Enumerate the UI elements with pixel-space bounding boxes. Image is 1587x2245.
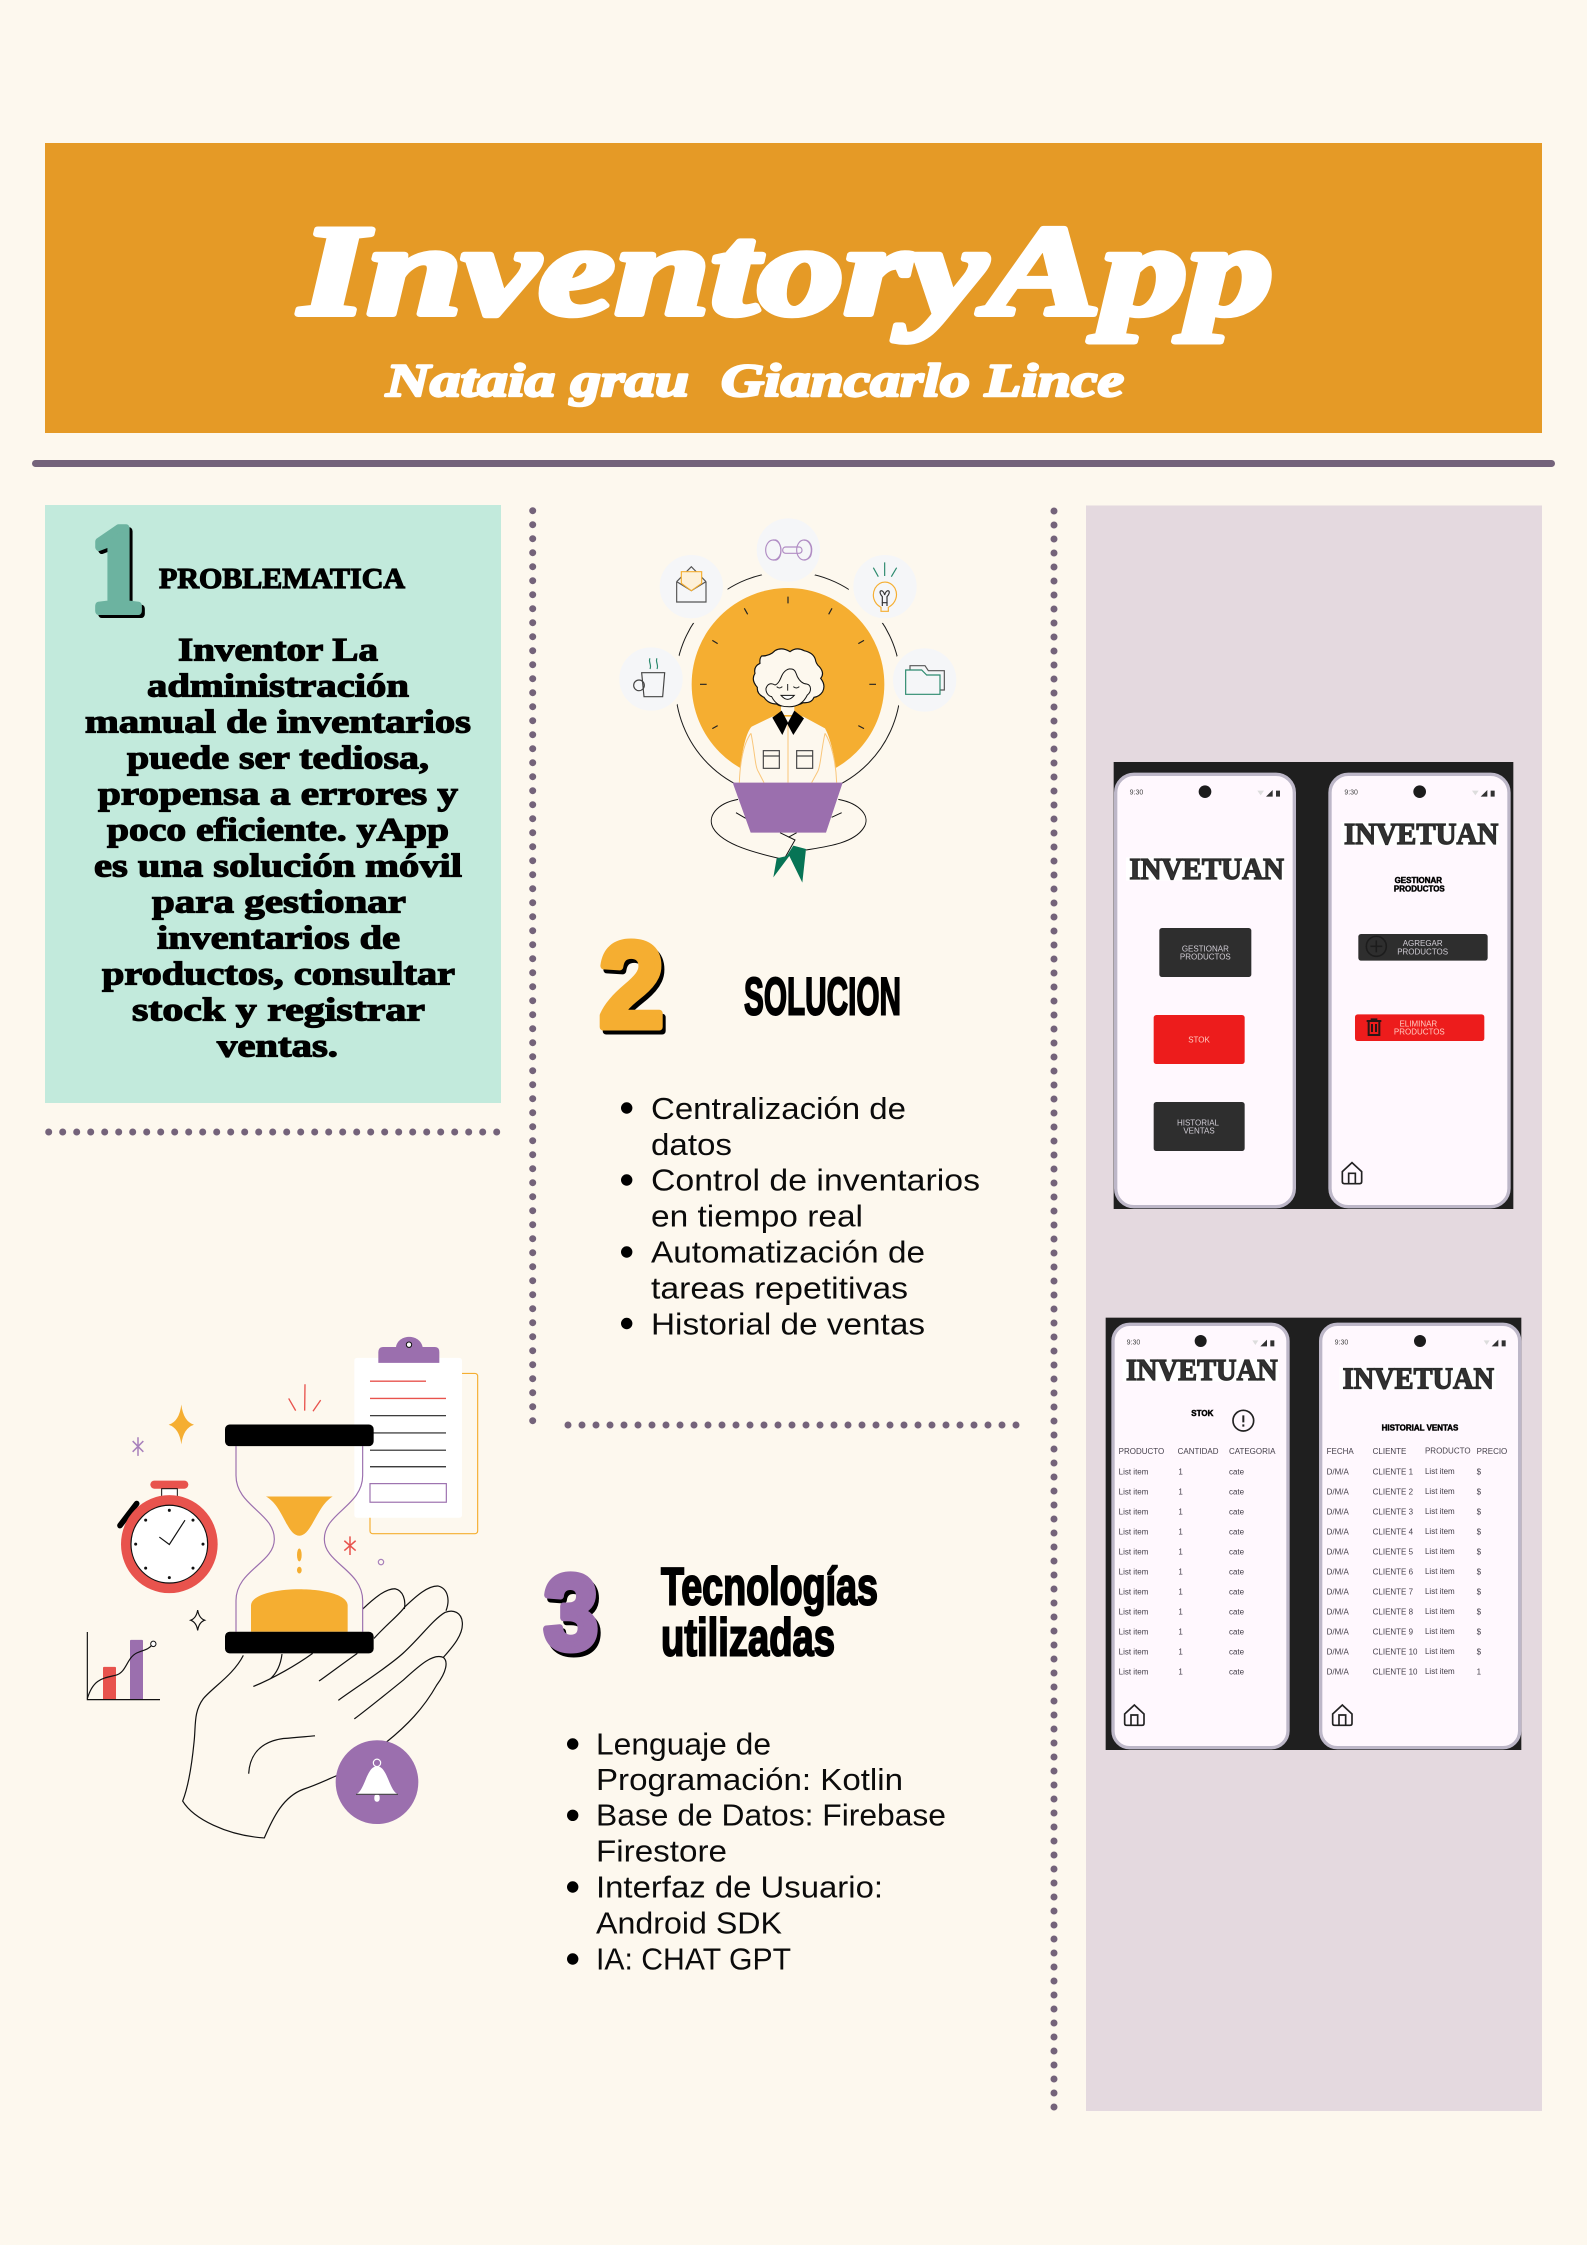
phone: sales history: List item	[1425, 1587, 1455, 1596]
phone: stock: List item	[1119, 1567, 1149, 1576]
icon: folder	[906, 666, 944, 694]
phone: sales history: FECHA	[1327, 1447, 1354, 1456]
phone: stock: List item	[1119, 1647, 1149, 1656]
phone: sales history: D/M/A	[1327, 1547, 1350, 1556]
phone: main menu: 9:30	[1130, 790, 1143, 797]
list: solucion points: Historial de ventas	[651, 1306, 925, 1341]
section 2: solucion	[599, 917, 980, 1341]
list: solucion points: en tiempo real	[651, 1199, 863, 1234]
authors: Giancarlo Lince	[721, 355, 1124, 407]
hand	[183, 1586, 462, 1838]
phone: sales history: List item	[1425, 1607, 1455, 1616]
phone: sales history: D/M/A	[1327, 1587, 1350, 1596]
list: solucion points: Centralización de	[651, 1091, 906, 1126]
text block: problem description: propensa a errores y	[98, 776, 459, 812]
phone: main menu: INVETUAN	[1129, 852, 1284, 886]
text block: problem description: para gestionar	[152, 884, 406, 920]
number 3: 3	[547, 1558, 601, 1676]
illustration: hourglass on hand	[87, 1337, 478, 1838]
phone: sales history: D/M/A	[1327, 1487, 1350, 1496]
phone: sales history: $	[1477, 1527, 1482, 1536]
phone: stock: 1	[1178, 1487, 1183, 1496]
heading: tecnologias utilizadas	[661, 1558, 878, 1668]
phone: main menu: GESTIONAR	[1182, 944, 1229, 953]
phone: sales history: $	[1477, 1567, 1482, 1576]
list: solucion points: tareas repetitivas	[651, 1270, 908, 1305]
phone: main menu	[1116, 774, 1294, 1207]
phone: sales history: List item	[1425, 1627, 1455, 1636]
title: InventoryApp	[297, 199, 1273, 342]
phone: sales history: $	[1477, 1627, 1482, 1636]
phone: sales history: List item	[1425, 1547, 1455, 1556]
list: solucion points: Control de inventarios	[651, 1163, 980, 1198]
phone: sales history: CLIENTE	[1373, 1447, 1406, 1456]
text block: problem description: stock y registrar	[132, 992, 425, 1028]
phone: stock: List item	[1119, 1467, 1149, 1476]
phone: stock: CATEGORIA	[1229, 1447, 1276, 1456]
phone: stock: cate	[1229, 1567, 1245, 1576]
text block: problem description: ventas.	[217, 1028, 338, 1064]
icon: dumbbell	[766, 540, 812, 560]
phone: stock: 1	[1178, 1627, 1183, 1636]
authors	[385, 355, 1124, 407]
phone: sales history: List item	[1425, 1467, 1455, 1476]
phone: sales history: D/M/A	[1327, 1467, 1350, 1476]
phone: sales history	[1321, 1324, 1520, 1748]
phone: sales history: CLIENTE 7	[1373, 1587, 1414, 1596]
phone: stock: List item	[1119, 1607, 1149, 1616]
phone: sales history: D/M/A	[1327, 1627, 1350, 1636]
text block: problem description: administración	[147, 668, 409, 704]
phone: sales history: D/M/A	[1327, 1607, 1350, 1616]
phone: sales history: $	[1477, 1467, 1482, 1476]
number 2: 2	[599, 917, 664, 1053]
text block: problem description: Inventor La	[178, 632, 378, 668]
phone: sales history: D/M/A	[1327, 1567, 1350, 1576]
icon: coffee cup	[634, 658, 665, 697]
phone: manage products: PRODUCTOS	[1394, 1028, 1445, 1037]
phone: stock: cate	[1229, 1587, 1245, 1596]
phone: stock: PRODUCTO	[1119, 1447, 1164, 1456]
phone: sales history: CLIENTE 3	[1373, 1507, 1414, 1516]
heading: tecnologias utilizadas: utilizadas	[661, 1608, 835, 1668]
phone: sales history: INVETUAN	[1343, 1361, 1494, 1395]
phone: sales history: 1	[1477, 1667, 1482, 1676]
phone: sales history: List item	[1425, 1647, 1455, 1656]
phone: manage products: AGREGAR	[1403, 939, 1443, 948]
panel: problematica	[45, 501, 501, 1103]
phone: sales history: $	[1477, 1587, 1482, 1596]
heading: tecnologias utilizadas: Tecnologías	[661, 1558, 878, 1616]
screenshots: main menu and manage products	[1114, 762, 1513, 1209]
phone: manage products: INVETUAN	[1344, 817, 1498, 851]
list: technologies	[567, 1726, 946, 1976]
phone: manage products: PRODUCTOS	[1394, 884, 1445, 893]
phone: stock: cate	[1229, 1527, 1245, 1536]
screenshots: stock and sales history	[1106, 1318, 1521, 1750]
phone: stock: List item	[1119, 1547, 1149, 1556]
heading: problematica: PROBLEMATICA	[159, 563, 405, 595]
section 3: tecnologias	[544, 1554, 946, 1976]
text block: problem description: es una solución móvil	[94, 848, 462, 884]
person	[739, 649, 837, 783]
text block: problem description: inventarios de	[157, 920, 400, 956]
icon: light bulb	[873, 562, 897, 611]
text block: problem description: manual de inventarios	[85, 704, 471, 740]
phone: stock: cate	[1229, 1467, 1245, 1476]
list: technologies: Interfaz de Usuario:	[596, 1869, 883, 1904]
panel: app screenshots	[1086, 506, 1542, 2111]
number 3: 3	[544, 1554, 598, 1672]
phone: sales history: $	[1477, 1487, 1482, 1496]
phone: sales history: List item	[1425, 1667, 1455, 1676]
text block: problem description: puede ser tediosa,	[127, 740, 429, 776]
phone: stock: cate	[1229, 1607, 1245, 1616]
phone: stock: List item	[1119, 1627, 1149, 1636]
phone: stock	[1113, 1324, 1288, 1748]
heading: solucion: SOLUCION	[744, 968, 901, 1026]
phone: stock: CANTIDAD	[1178, 1447, 1219, 1456]
phone: sales history: $	[1477, 1647, 1482, 1656]
phone: stock: 1	[1178, 1667, 1183, 1676]
phone: stock: List item	[1119, 1487, 1149, 1496]
phone: main menu: PRODUCTOS	[1180, 952, 1231, 961]
phone: sales history: D/M/A	[1327, 1527, 1350, 1536]
phone: stock: 1	[1178, 1647, 1183, 1656]
phone: stock: 1	[1178, 1527, 1183, 1536]
text block: problem description: productos, consultar	[102, 956, 455, 992]
phone: stock: List item	[1119, 1527, 1149, 1536]
phone: sales history: CLIENTE 5	[1373, 1547, 1414, 1556]
phone: stock: INVETUAN	[1126, 1353, 1278, 1387]
phone: sales history: CLIENTE 2	[1373, 1487, 1414, 1496]
list: technologies: Base de Datos: Firebase	[596, 1798, 946, 1833]
phone: stock: cate	[1229, 1627, 1245, 1636]
phone: sales history: List item	[1425, 1487, 1455, 1496]
icon: mail	[677, 567, 706, 602]
phone: stock: cate	[1229, 1507, 1245, 1516]
phone: manage products: 9:30	[1344, 790, 1358, 797]
icon: bell	[336, 1740, 418, 1824]
list: technologies: IA: CHAT GPT	[596, 1941, 791, 1976]
phone: sales history: D/M/A	[1327, 1507, 1350, 1516]
list: technologies: Lenguaje de	[596, 1726, 771, 1761]
list: technologies: Android SDK	[596, 1905, 782, 1940]
phone: sales history: PRODUCTO	[1425, 1447, 1471, 1456]
number 1: 1	[93, 504, 147, 642]
phone: sales history: 9:30	[1335, 1339, 1348, 1346]
phone: sales history: List item	[1425, 1527, 1455, 1536]
phone: manage products: GESTIONAR	[1395, 876, 1442, 885]
phone: sales history: $	[1477, 1547, 1482, 1556]
phone: sales history: D/M/A	[1327, 1647, 1350, 1656]
phone: sales history: CLIENTE 10	[1373, 1667, 1418, 1676]
header banner	[45, 143, 1542, 433]
phone: sales history: CLIENTE 9	[1373, 1627, 1414, 1636]
phone: stock: 1	[1178, 1547, 1183, 1556]
phone: manage products	[1330, 774, 1509, 1207]
phone: stock: 9:30	[1127, 1339, 1140, 1346]
laptop	[733, 783, 843, 833]
phone: sales history: List item	[1425, 1507, 1455, 1516]
phone: stock: 1	[1178, 1467, 1183, 1476]
list: technologies: Firestore	[596, 1834, 727, 1869]
sparkles	[133, 1384, 384, 1630]
phone: stock: List item	[1119, 1587, 1149, 1596]
phone: sales history: CLIENTE 1	[1373, 1467, 1414, 1476]
stopwatch	[120, 1481, 218, 1593]
phone: stock: cate	[1229, 1487, 1245, 1496]
phone: stock: 1	[1178, 1607, 1183, 1616]
icon circles	[617, 516, 959, 714]
phone: stock: 1	[1178, 1507, 1183, 1516]
number 1: 1	[90, 501, 144, 639]
phone: stock: cate	[1229, 1547, 1245, 1556]
phone: sales history: HISTORIAL VENTAS	[1382, 1424, 1459, 1433]
phone: main menu: STOK	[1188, 1035, 1210, 1044]
list: solucion points: Automatización de	[651, 1235, 925, 1270]
bar chart	[87, 1632, 160, 1700]
phone: sales history: CLIENTE 6	[1373, 1567, 1414, 1576]
clipboard	[354, 1337, 478, 1534]
text block: problem description	[85, 632, 471, 1064]
phone: stock: List item	[1119, 1507, 1149, 1516]
phone: stock: cate	[1229, 1667, 1245, 1676]
list: technologies: Programación: Kotlin	[596, 1762, 903, 1797]
phone: main menu: HISTORIAL	[1177, 1118, 1220, 1127]
phone: stock: 1	[1178, 1587, 1183, 1596]
number 2: 2	[602, 921, 667, 1057]
phone: sales history: PRECIO	[1477, 1447, 1507, 1456]
phone: sales history: CLIENTE 4	[1373, 1527, 1414, 1536]
phone: stock: List item	[1119, 1667, 1149, 1676]
hourglass	[225, 1424, 374, 1653]
text block: problem description: poco eficiente. yApp	[107, 812, 449, 848]
list: solucion points	[621, 1091, 980, 1341]
phone: sales history: CLIENTE 8	[1373, 1607, 1414, 1616]
list: solucion points: datos	[651, 1127, 732, 1162]
phone: manage products: PRODUCTOS	[1397, 947, 1448, 956]
illustration: person with laptop and icons	[617, 516, 959, 883]
authors: Nataia grau	[385, 355, 689, 407]
phone: main menu: VENTAS	[1183, 1126, 1215, 1135]
phone: sales history: List item	[1425, 1567, 1455, 1576]
legs	[711, 799, 866, 859]
phone: stock: cate	[1229, 1647, 1245, 1656]
phone: manage products: ELIMINAR	[1399, 1020, 1437, 1029]
phone: stock: STOK	[1191, 1409, 1214, 1418]
phone: sales history: CLIENTE 10	[1373, 1647, 1418, 1656]
phone: stock: 1	[1178, 1567, 1183, 1576]
phone: sales history: $	[1477, 1607, 1482, 1616]
phone: sales history: D/M/A	[1327, 1667, 1350, 1676]
phone: sales history: $	[1477, 1507, 1482, 1516]
